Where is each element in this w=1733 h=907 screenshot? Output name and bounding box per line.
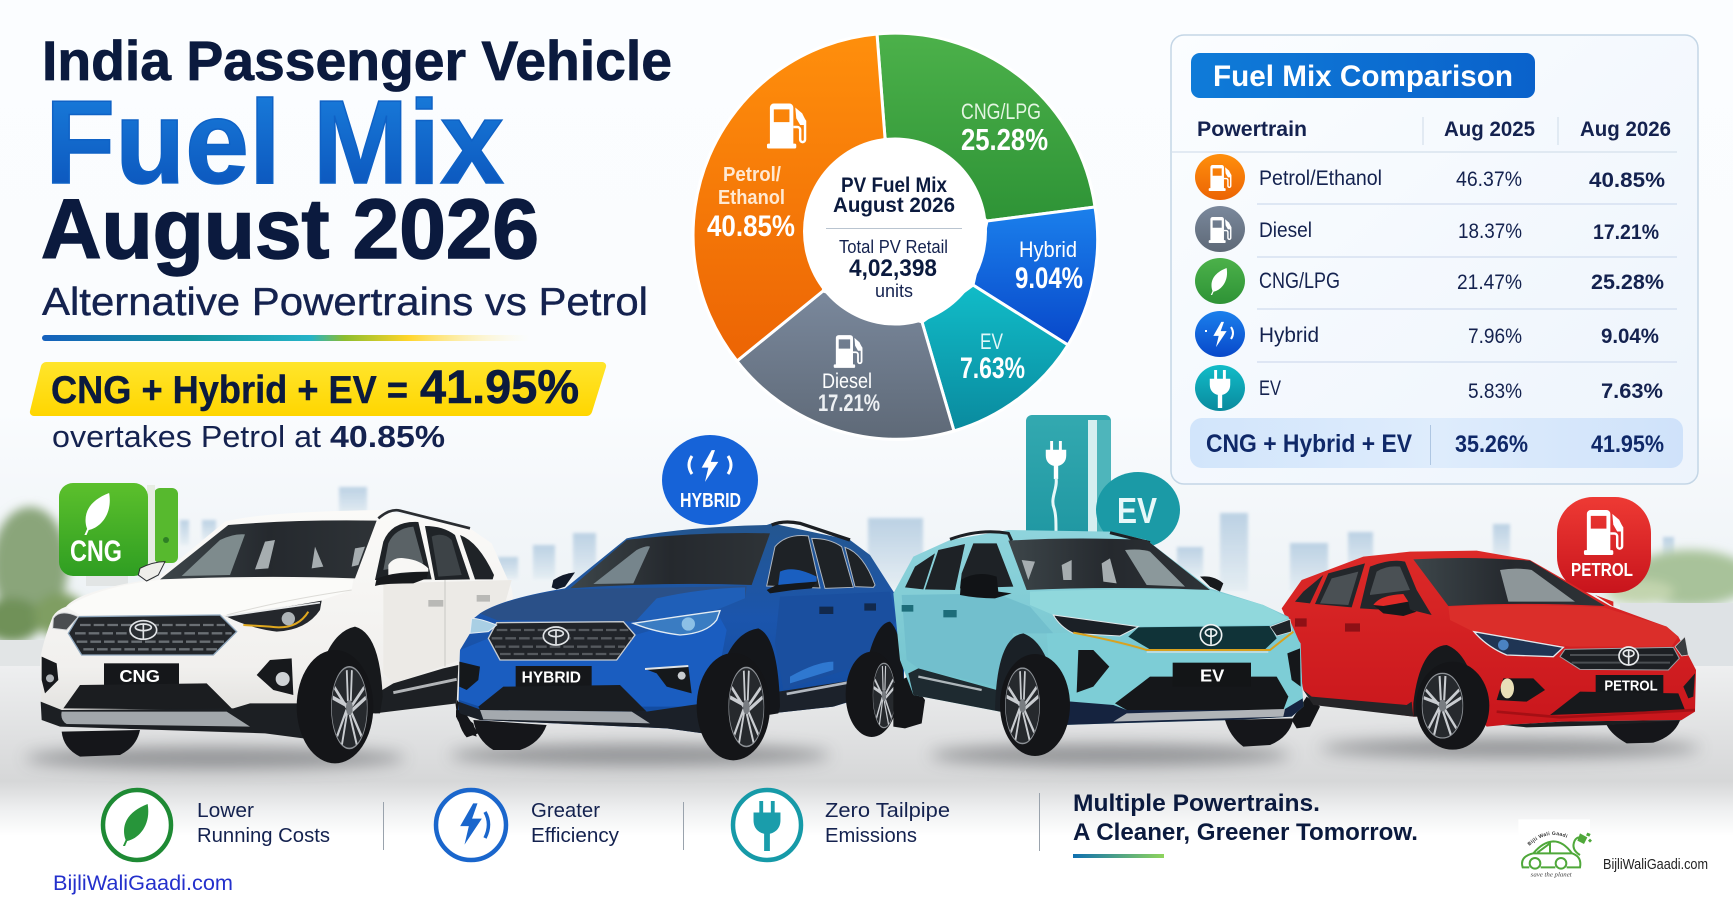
row: Petrol/Ethanol: [1195, 154, 1665, 200]
side panel shading: [902, 593, 1053, 687]
lower grille: [63, 683, 233, 710]
fog lamps: [42, 657, 58, 693]
fog lamps: [1497, 678, 1545, 702]
hood highlight: [67, 579, 353, 615]
table header: Aug 2025: [1444, 118, 1535, 141]
Petrol badge: [1557, 497, 1651, 593]
petrol label: Petrol/: [723, 164, 781, 186]
number plate: EV: [1200, 666, 1225, 686]
body: [893, 530, 1303, 725]
benefit: greater efficiency: Greater: [531, 800, 600, 822]
white CNG car: [40, 510, 513, 763]
number plate: [104, 663, 179, 688]
EV charging station: [1026, 415, 1111, 540]
Petrol badge: PETROL: [1571, 560, 1633, 580]
grille: [1560, 647, 1679, 670]
red Petrol car: [1282, 551, 1696, 750]
logo arc text: Bijli Wali Gaadi: [1527, 832, 1568, 846]
icon: petrol pump: [767, 104, 805, 148]
title line 2: Fuel Mix: [45, 76, 504, 209]
row: Hybrid: 7.96%: [1468, 325, 1522, 348]
grille: [488, 622, 635, 660]
handles: [902, 605, 957, 617]
number plate: PETROL: [1604, 678, 1658, 694]
windshield: [160, 520, 377, 579]
icon: green car: [1522, 837, 1582, 869]
hood highlight: [1030, 589, 1288, 627]
roof rails: [950, 532, 1150, 543]
row: combined total: [1190, 418, 1683, 468]
side windows: [1295, 561, 1432, 615]
subtitle: Alternative Powertrains vs Petrol: [42, 281, 648, 324]
CNG sign: [59, 483, 178, 586]
gradient rule: [42, 335, 530, 341]
headlight right: [633, 611, 720, 635]
row: Diesel: Diesel: [1259, 219, 1312, 242]
row: Petrol/Ethanol: 46.37%: [1456, 168, 1522, 191]
logo: [1619, 647, 1638, 665]
rear wheel: [846, 652, 898, 737]
benefit: greater efficiency: [436, 790, 619, 860]
panel heading: [1191, 53, 1535, 98]
donut hole: [803, 138, 987, 326]
diesel label: [818, 370, 880, 417]
trees left: [0, 507, 86, 642]
blue Hybrid car: [456, 522, 904, 760]
row: Hybrid: 9.04%: [1601, 325, 1659, 348]
body: [40, 510, 513, 733]
logo: [1200, 625, 1222, 645]
handles: [819, 603, 876, 614]
CNG label: CNG/LPG: [961, 99, 1041, 124]
roof rail: [378, 510, 470, 528]
slice: Hybrid: [973, 207, 1098, 345]
mirrors: [1373, 602, 1417, 616]
teal EV car: [893, 530, 1303, 756]
wheel arch: [1413, 645, 1478, 717]
near wheel: [1416, 662, 1489, 750]
row: Hybrid: [1195, 311, 1659, 357]
centre label: August 2026: [833, 194, 955, 217]
wheel arch: [313, 627, 383, 713]
side windows: [375, 522, 494, 580]
windshield: [1413, 558, 1605, 606]
benefit: lower running costs: Running Costs: [197, 825, 330, 847]
road floor: [0, 666, 1733, 836]
table header: Aug 2026: [1580, 118, 1671, 141]
side panel shading: [383, 580, 512, 683]
row: CNG/LPG: 21.47%: [1457, 271, 1522, 294]
CNG sign: CNG: [70, 535, 122, 568]
centre label: Total PV Retail: [839, 237, 948, 257]
diesel label: Diesel: [822, 370, 872, 393]
bumper band: [458, 702, 717, 733]
benefit: zero tailpipe emissions: Emissions: [825, 825, 917, 847]
centre label: [826, 174, 962, 301]
headlight: [1053, 615, 1138, 636]
row: EV: 7.63%: [1601, 380, 1663, 403]
row: CNG/LPG: [1195, 258, 1664, 304]
EV badge: EV: [1117, 490, 1157, 531]
logo: [543, 627, 569, 645]
roof rail: [772, 522, 850, 540]
hybrid label: [1015, 237, 1083, 295]
skid plate: [1113, 709, 1285, 722]
petrol label: 40.85%: [707, 210, 795, 243]
hood highlight: [1448, 605, 1678, 647]
row: Petrol/Ethanol: 40.85%: [1589, 169, 1665, 192]
tagline: A Cleaner, Greener Tomorrow.: [1073, 819, 1418, 846]
front-right wheel: [1607, 721, 1680, 743]
row: Petrol/Ethanol: Petrol/Ethanol: [1259, 167, 1382, 190]
row: CNG/LPG: CNG/LPG: [1259, 268, 1340, 293]
centre label: 4,02,398: [849, 255, 937, 282]
headlight: [1474, 632, 1563, 657]
skid plate: [480, 710, 650, 723]
fog lamps: [459, 662, 480, 690]
grille: [68, 615, 237, 655]
front fascia colour: [1047, 633, 1303, 710]
tagline: [1073, 790, 1418, 858]
front fascia colour: [459, 612, 727, 707]
icon: diesel pump: [834, 335, 862, 368]
EV label: [960, 329, 1025, 385]
windshield: [1008, 538, 1210, 590]
skid plate: [61, 712, 250, 727]
logo caption: BijliWaliGaadi.com: [1603, 856, 1708, 873]
lower grille: [1115, 677, 1288, 710]
table header: [1197, 118, 1671, 141]
side panel highlight: [775, 592, 897, 690]
CNG label: 25.28%: [961, 122, 1048, 157]
car shadows: [25, 738, 1700, 769]
rear wheel: [455, 697, 478, 737]
side cladding: [772, 678, 865, 713]
side cladding: [908, 668, 1000, 712]
logo: [130, 621, 157, 639]
slice: Petrol: [693, 34, 885, 361]
icon: petrol pump: [1584, 510, 1622, 555]
EV badge: [1096, 472, 1180, 548]
fog lamps: [1077, 650, 1109, 693]
row: combined total: CNG + Hybrid + EV: [1206, 430, 1412, 458]
row: EV: EV: [1259, 377, 1281, 400]
bumper band: [41, 702, 320, 738]
headlight right: [225, 601, 322, 632]
tagline: Multiple Powertrains.: [1073, 790, 1320, 817]
icon: hybrid bolt: [702, 450, 718, 482]
background sky: [0, 0, 1733, 680]
website link: BijliWaliGaadi.com: [53, 872, 233, 895]
distant city skyline: [180, 487, 1674, 591]
benefit: greater efficiency: Efficiency: [531, 825, 619, 847]
EV label: 7.63%: [960, 352, 1025, 385]
petrol label: Ethanol: [718, 187, 785, 209]
slice: EV: [922, 285, 1068, 431]
centre label: units: [875, 281, 913, 301]
roadside walls: [0, 603, 1733, 668]
wheel arches: [713, 628, 780, 723]
banner equation: CNG + Hybrid + EV =: [51, 369, 408, 412]
diesel label: 17.21%: [818, 390, 880, 417]
side cladding: [1303, 690, 1413, 717]
slice: CNG/LPG: [877, 33, 1095, 221]
row: combined total: 35.26%: [1455, 431, 1528, 458]
rear wheel: [893, 677, 925, 728]
highlight banner: [30, 360, 606, 416]
side windows: [905, 543, 1013, 590]
door lines and handles: [443, 580, 446, 667]
panel: fuel mix comparison table: [1171, 35, 1698, 484]
benefit: lower running costs: Lower: [197, 800, 254, 822]
lower grille: [478, 685, 647, 712]
lower band: [1052, 698, 1303, 725]
Hybrid badge: HYBRID: [680, 490, 741, 512]
lip: [1497, 710, 1695, 717]
near wheel: [1000, 654, 1070, 756]
centre label: PV Fuel Mix: [841, 174, 947, 197]
front-left wheel: [62, 730, 140, 757]
icon: leaf ring: [103, 790, 171, 860]
table header: Powertrain: [1197, 118, 1307, 141]
CNG label: [961, 99, 1048, 157]
body: [458, 523, 904, 733]
banner value: 41.95%: [420, 360, 579, 413]
row: Diesel: 17.21%: [1593, 221, 1659, 244]
logo slogan: save the planet: [1531, 872, 1572, 879]
Hybrid badge: [662, 435, 758, 525]
front-right wheel: [297, 650, 373, 763]
panel heading: Fuel Mix Comparison: [1213, 60, 1513, 93]
icon: plug ring: [733, 790, 801, 860]
icon: plug: [1046, 441, 1066, 479]
handles: [1295, 618, 1360, 632]
benefit: zero tailpipe emissions: Zero Tailpipe: [825, 800, 950, 822]
mirrors: [767, 582, 817, 593]
benefit: zero tailpipe emissions: [733, 790, 950, 860]
EV label: EV: [980, 329, 1003, 354]
row: CNG/LPG: 25.28%: [1591, 271, 1664, 294]
mirrors: [960, 574, 1012, 598]
rear wheel: [1292, 697, 1320, 728]
title line 1: India Passenger Vehicle: [42, 29, 672, 92]
row: EV: 5.83%: [1468, 380, 1522, 403]
wheel arch: [995, 633, 1057, 717]
headlight left: [53, 613, 78, 630]
row: Diesel: 18.37%: [1458, 220, 1522, 243]
body: [1282, 551, 1696, 727]
icon: leaf: [84, 493, 110, 536]
row: EV: [1195, 365, 1663, 411]
row: Hybrid: Hybrid: [1259, 324, 1319, 347]
front-right wheel: [697, 653, 770, 760]
row: Diesel: [1195, 206, 1659, 252]
number plate: [1173, 663, 1251, 687]
petrol label: [707, 164, 795, 243]
icon: bolt ring: [436, 790, 506, 860]
number plate: [1596, 675, 1663, 696]
front-right wheel: [1225, 718, 1293, 747]
side cladding: [375, 665, 458, 713]
mirrors: [375, 572, 428, 586]
row: combined total: 41.95%: [1591, 431, 1664, 458]
number plate: [516, 666, 592, 689]
overtakes line: overtakes Petrol at: [52, 419, 321, 454]
trees right: [1606, 550, 1733, 606]
title line 3: August 2026: [41, 182, 539, 276]
logo: [1518, 820, 1592, 879]
windshield: [570, 533, 770, 588]
headlight left: [470, 618, 497, 633]
title block: [41, 29, 672, 324]
hybrid label: Hybrid: [1019, 237, 1077, 262]
number plate: HYBRID: [522, 670, 581, 687]
front-left wheel: [473, 720, 547, 750]
slice: Diesel: [737, 291, 954, 439]
side windows: [767, 536, 875, 588]
benefit: lower running costs: [103, 790, 330, 860]
hood highlight: [480, 586, 747, 622]
icon: plug head: [1577, 833, 1592, 844]
lower grille: [1550, 692, 1685, 715]
grille band: [1128, 626, 1277, 649]
overtakes line: [52, 419, 445, 454]
hybrid label: 9.04%: [1015, 262, 1083, 295]
number plate: CNG: [119, 666, 160, 686]
overtakes line: 40.85%: [330, 419, 445, 454]
donut chart: [693, 33, 1098, 439]
